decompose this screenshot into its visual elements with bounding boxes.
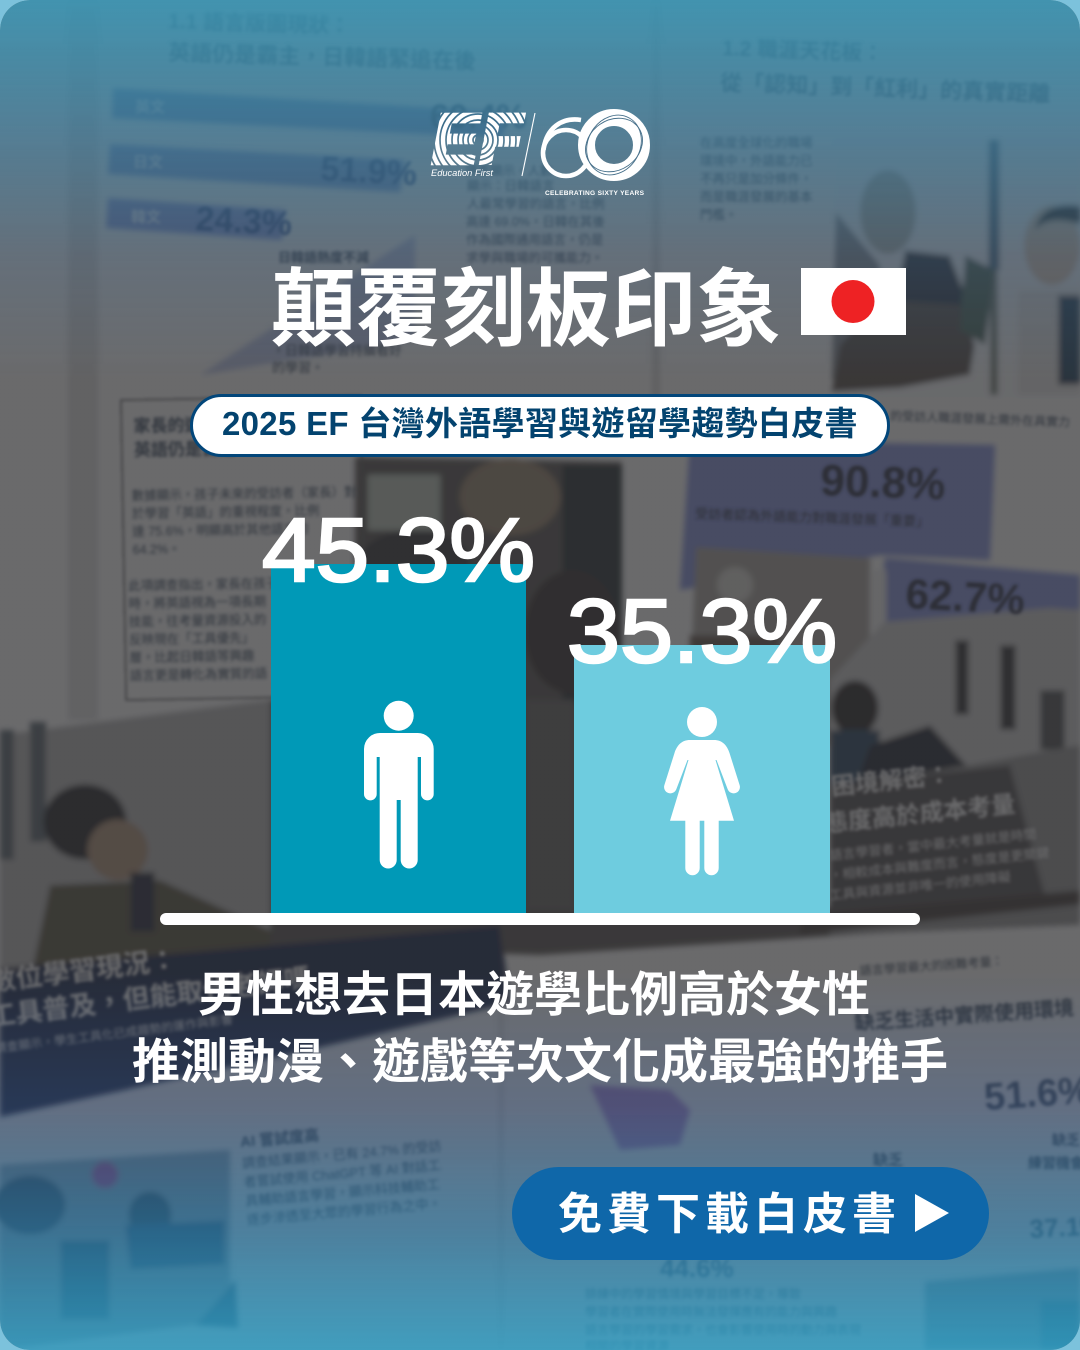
blurred report pages background: 調查顯示，學生工具化已成趨勢的運作與影響 xyxy=(0,1011,234,1056)
blurred report pages background: 時，將英語視為一項長期 xyxy=(128,594,266,611)
blurred report pages background: 的受訪人職涯發展上需外在具實力 xyxy=(890,408,1070,429)
blurred report pages background: 於學習「英語」的重視程度，比例 xyxy=(132,503,320,521)
blurred report pages background: 學習者在實際使用時無法發揮應有的能力與興趣 xyxy=(585,1304,837,1319)
bottom left photo xyxy=(0,1150,230,1350)
blurred report pages background: 44.6% xyxy=(660,1253,734,1283)
call to action button: 免費下載白皮書 xyxy=(558,1190,901,1239)
blurred report pages background: 語言學習者，當中最大考量就是時間 xyxy=(829,826,1037,863)
blurred report pages background: 達 75.6%，明顯高於其他語言的 xyxy=(132,521,309,539)
body text: 男性想去日本遊學比例高於女性 xyxy=(198,969,870,1022)
blurred report pages background: 缺乏 xyxy=(873,1151,903,1169)
blurred report pages background: 51.9% xyxy=(320,150,418,193)
right middle photos xyxy=(690,547,870,760)
blurred report pages background: 排練中的學習情境與學習目標不足，導致 xyxy=(585,1286,801,1301)
Education First: Education First xyxy=(431,168,493,179)
blurred report pages background: AI 嘗試度高 xyxy=(239,1126,320,1151)
blurred report pages background: 求學與職場的可攜能力。 xyxy=(466,250,604,265)
blurred report pages background: 反映現在「工具優先」 xyxy=(129,630,254,647)
right middle periwinkle cards xyxy=(680,440,995,590)
blurred report pages background: 門檻。 xyxy=(700,208,738,222)
blurred report pages background: 從「認知」到「紅利」的真實距離 xyxy=(720,70,1051,107)
blurred report pages background: 不再只是加分條件， xyxy=(700,172,813,186)
body text xyxy=(132,969,948,1092)
call to action button xyxy=(512,1167,989,1260)
60 mark xyxy=(543,105,653,185)
blurred report pages background: 者嘗試使用 ChatGPT 等 AI 對話工 xyxy=(243,1158,441,1190)
blurred report pages background: 調查結果顯示，已有 24.7% 的受訪 xyxy=(241,1138,442,1171)
blurred report pages background: 具輔助語言學習，顯示科技輔助工 xyxy=(245,1177,440,1209)
subtitle pill: 2025 EF 台灣外語學習與遊留學趨勢白皮書 xyxy=(222,405,858,442)
blurred report pages background: 態度高於成本考量 xyxy=(823,791,1017,838)
blurred report pages background: 困境解密： xyxy=(830,761,952,801)
blurred report pages background: 語言學習最大的困難考量： xyxy=(859,953,1004,978)
middle dark photo xyxy=(270,457,1000,955)
blurred report pages background: 此項調查指出，家長在孩子學 xyxy=(128,575,291,593)
bars xyxy=(112,88,505,138)
blurred report pages background: 家長的選擇： xyxy=(133,414,236,436)
baseline xyxy=(160,913,920,925)
top right photo xyxy=(835,140,1080,398)
blurred report pages background: 日文 xyxy=(133,153,163,171)
boy photo xyxy=(0,700,270,985)
blurred report pages background: 作為國際通用語言，仍是 xyxy=(466,232,604,247)
blurred report pages background: 數據顯示，孩子未來的受訪者（家長）對 xyxy=(132,484,357,503)
logo: EF 60 xyxy=(430,109,650,197)
blurred report pages background: ，相較成本與難度而言，態度是更關鍵 xyxy=(829,845,1050,883)
EF mark: EF xyxy=(431,100,525,180)
blurred report pages background: 而是職涯發展的基本 xyxy=(700,189,813,204)
blurred report pages background: 英語仍是首選 xyxy=(134,438,236,460)
blurred report pages background: 語言學習的學習需求，也會影響使用時的動力與表現 xyxy=(585,1322,861,1337)
icon: Japan flag xyxy=(801,268,906,335)
blurred report pages background: 高達 69.0%，日韓在其後 xyxy=(466,214,605,229)
blurred report pages background: 技能，往考量資源投入的 xyxy=(129,612,266,629)
blurred report pages background: 90.8% xyxy=(820,456,946,509)
blurred report pages background: 的學習。 xyxy=(272,360,324,375)
blurred report pages background: 日韓語熱度不減 xyxy=(278,250,369,265)
blurred report pages background: 24.3% xyxy=(195,200,293,243)
bar: male: 45.3% xyxy=(262,501,535,601)
blurred report pages background: 逐步滲透至大眾的學習行為之中。 xyxy=(246,1196,442,1228)
bar: female: 35.3% xyxy=(567,582,837,682)
blurred report pages background: 英文 xyxy=(135,98,165,116)
blurred report pages background: 調查顯示，人數 xyxy=(465,164,553,178)
blurred report pages background: 層，比起日韓語等興趣 xyxy=(129,648,255,665)
blurred report pages background: 顯示：日韓語言 xyxy=(467,178,555,193)
blurred report pages background: 語言更是轉化為實質的語 xyxy=(130,666,268,683)
blurred report pages background: ，日韓語學習持續看好 xyxy=(272,343,402,358)
blurred report pages background: 60.4% xyxy=(430,98,526,136)
blurred report pages background: 英語仍是霸主，日韓語緊追在後 xyxy=(168,40,476,74)
body text: 推測動漫、遊戲等次文化成最強的推手 xyxy=(132,1022,948,1092)
bar: male xyxy=(262,501,535,913)
navy banner xyxy=(0,925,510,1117)
icon: male xyxy=(364,701,434,868)
icon: female xyxy=(664,707,740,875)
blurred report pages background: 64.2%。 xyxy=(132,542,181,557)
blurred report pages background: 韓文 xyxy=(131,208,161,226)
blurred report pages background: 缺乏生活中實際使用環境 xyxy=(854,996,1075,1035)
head silhouette xyxy=(590,1085,690,1150)
blurred report pages background: 缺乏 xyxy=(1052,1132,1080,1148)
blurred report pages background: 1.1 語言版圖現狀： xyxy=(168,10,350,38)
blurred report pages background: 1.2 職涯天花板： xyxy=(722,37,884,66)
subtitle pill xyxy=(190,394,890,457)
blurred report pages background: 人最常學習的語言，比例 xyxy=(467,196,605,211)
tagline: CELEBRATING SIXTY YEARS xyxy=(545,190,645,197)
blurred report pages background: 環境中，外語能力已 xyxy=(700,153,813,168)
blurred report pages background: 在高度全球化的職場 xyxy=(700,135,813,150)
blurred report pages background: 受訪者認為外語能力對職涯發展「重要」 xyxy=(695,506,929,529)
icon: play arrow xyxy=(915,1194,949,1232)
blurred report pages background: 62.7% xyxy=(905,570,1026,623)
title: 顛覆刻板印象 xyxy=(271,263,781,358)
bar chart xyxy=(160,501,920,925)
bottom right photo xyxy=(925,1268,1080,1350)
blurred report pages background: 工具與資源並非唯一的使用障礙 xyxy=(829,869,1011,903)
bar: female xyxy=(567,582,837,913)
